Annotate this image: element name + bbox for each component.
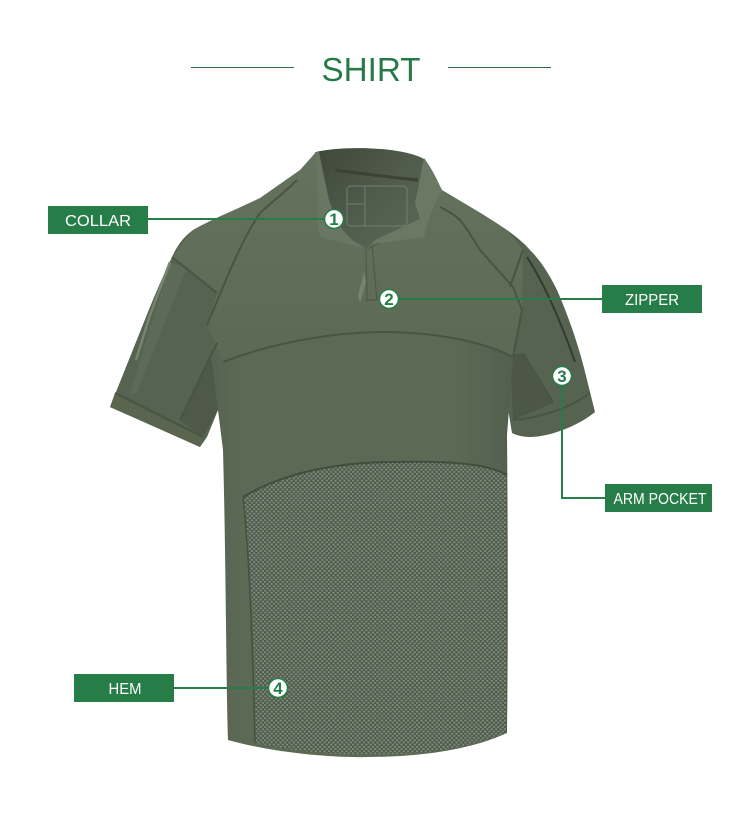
label: zipper: [602, 285, 702, 313]
zipper placket: [366, 246, 377, 300]
label: collar: COLLAR: [65, 213, 131, 230]
marker 4: 4: [273, 679, 283, 698]
yoke and shoulders: [172, 152, 523, 362]
left sleeve: [110, 230, 235, 447]
collar left flap: [315, 152, 366, 248]
torso: [207, 320, 520, 757]
marker 2: 2: [384, 290, 394, 309]
callout 3: arm pocket: [552, 366, 712, 512]
side panel seam: [243, 497, 255, 743]
callout 2: zipper: [380, 285, 702, 313]
mesh panel: [243, 462, 506, 755]
marker 4: [268, 678, 288, 698]
shirt illustration: [110, 148, 595, 757]
collar right flap: [367, 158, 442, 249]
zipper pull: [358, 272, 366, 303]
collar tag: [347, 186, 407, 226]
left sleeve underarm shade: [180, 343, 218, 437]
label: zipper: ZIPPER: [625, 292, 679, 309]
callout 4: hem: [74, 674, 288, 702]
marker 2: [380, 290, 398, 309]
label: collar: [48, 206, 148, 234]
label: arm pocket: ARM POCKET: [614, 491, 707, 508]
neck seam: [335, 170, 418, 180]
right sleeve pocket: [527, 257, 575, 362]
label: arm pocket: [605, 484, 712, 512]
marker 1: 1: [329, 210, 339, 229]
callout 1: collar: [48, 206, 344, 234]
label: hem: [74, 674, 174, 702]
marker 3: [552, 366, 572, 386]
left sleeve pocket: [130, 263, 187, 393]
right sleeve underarm shade: [510, 353, 553, 420]
left cuff: [110, 393, 203, 447]
mesh upper seam: [243, 462, 507, 497]
label: hem: HEM: [108, 681, 142, 698]
marker 3: 3: [557, 367, 567, 386]
title: SHIRT: [322, 51, 420, 88]
raglan seams: [207, 180, 522, 357]
right sleeve: [500, 230, 595, 437]
collar inside: [316, 148, 424, 250]
marker 1: [324, 210, 344, 229]
chest seam: [223, 332, 513, 362]
